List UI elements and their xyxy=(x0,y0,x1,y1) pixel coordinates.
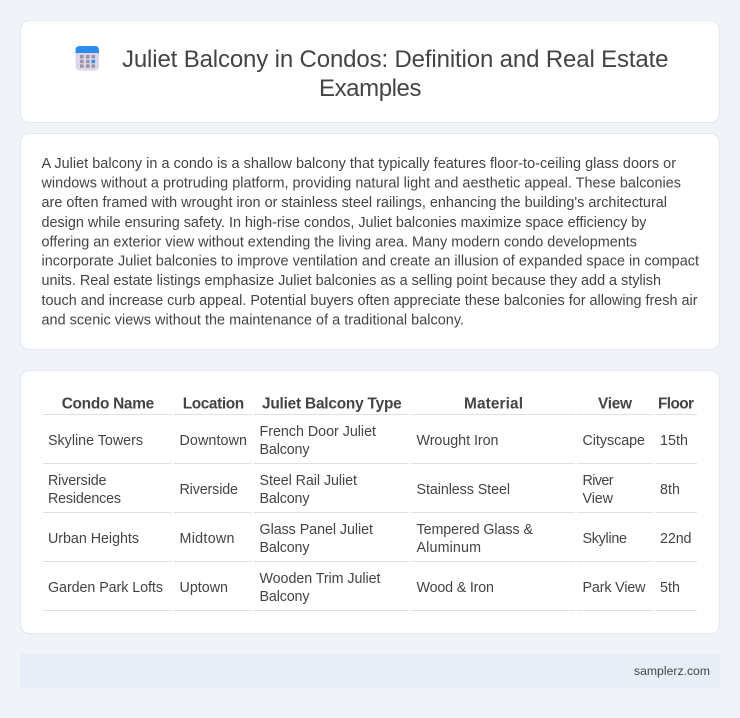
title: Juliet Balcony in Condos: Definition and Real Estate xyxy=(122,46,668,73)
table header: View xyxy=(598,396,632,412)
table row: Urban Heights: Glass Panel Juliet xyxy=(260,522,373,538)
table row: Riverside Residences: Riverside xyxy=(48,473,107,489)
table row: Urban Heights: Skyline xyxy=(582,531,627,547)
table row: Riverside Residences: Stainless Steel xyxy=(416,482,510,498)
description text: windows without a protruding platform, providing natural light and aesthetic appeal. These balconies xyxy=(40,176,681,192)
footer xyxy=(20,654,720,688)
table row: Garden Park Lofts: 5th xyxy=(660,580,680,596)
table header xyxy=(43,396,697,415)
panel: title card xyxy=(20,20,720,122)
table row: Skyline Towers: French Door Juliet xyxy=(260,424,376,440)
table row: Garden Park Lofts: Uptown xyxy=(180,580,228,596)
table row: Riverside Residences: View xyxy=(582,491,614,507)
description text: design while ensuring safety. In high-rise condos, Juliet balconies maximize space efficiency by xyxy=(42,215,647,231)
table row: Riverside Residences xyxy=(43,473,697,513)
table row: Urban Heights: Balcony xyxy=(260,540,310,556)
table row: Riverside Residences: 8th xyxy=(660,482,680,498)
table row: Urban Heights: Midtown xyxy=(180,531,235,547)
table row: Urban Heights: Aluminum xyxy=(416,540,481,556)
table row: Skyline Towers: Skyline Towers xyxy=(48,433,143,449)
description text: and scenic views without the maintenance of a traditional balcony. xyxy=(42,312,464,328)
table row: Garden Park Lofts: Park View xyxy=(582,580,646,596)
panel: condo table xyxy=(20,370,720,634)
table row: Skyline Towers xyxy=(43,424,697,464)
description text: offering an exterior view without extending the living area. Many modern condo developments xyxy=(42,234,637,250)
description text: touch and increase curb appeal. Potential buyers often appreciate these balconies for allowing fresh air xyxy=(42,293,698,309)
table row: Garden Park Lofts: Garden Park Lofts xyxy=(48,580,163,596)
table row: Riverside Residences: Riverside xyxy=(180,482,238,498)
table header: Condo Name xyxy=(62,396,155,412)
footer: samplerz.com xyxy=(634,664,710,678)
table row: Skyline Towers: 15th xyxy=(660,433,688,449)
description text: A Juliet balcony in a condo is a shallow balcony that typically features floor-to-ceiling glass doors or xyxy=(42,156,676,172)
icon: calendar xyxy=(76,46,99,70)
table row: Riverside Residences: Residences xyxy=(48,491,121,507)
table row: Urban Heights: Urban Heights xyxy=(48,531,139,547)
title: Examples xyxy=(319,75,422,102)
description text xyxy=(40,156,699,328)
table row: Skyline Towers: Wrought Iron xyxy=(416,433,499,449)
table row: Skyline Towers: Downtown xyxy=(180,433,247,449)
table header: Location xyxy=(183,396,244,412)
table header: Juliet Balcony Type xyxy=(262,396,402,412)
panel: description xyxy=(20,134,720,350)
title xyxy=(122,46,668,102)
table row: Riverside Residences: Steel Rail Juliet xyxy=(260,473,357,489)
table row: Riverside Residences: River xyxy=(582,473,614,489)
table row: Garden Park Lofts: Wood & Iron xyxy=(416,580,494,596)
description text: incorporate Juliet balconies to improve ventilation and create an illusion of expanded space in compact xyxy=(42,254,699,270)
table row: Urban Heights xyxy=(43,522,697,562)
table header: Floor xyxy=(658,396,694,412)
table row: Skyline Towers: Cityscape xyxy=(582,433,645,449)
table row: Skyline Towers: Balcony xyxy=(260,442,310,458)
table row: Urban Heights: 22nd xyxy=(660,531,692,547)
table row: Garden Park Lofts: Balcony xyxy=(260,589,310,605)
description text: are often framed with wrought iron or stainless steel railings, enhancing the building's architectural xyxy=(42,195,667,211)
table header: Material xyxy=(464,396,523,412)
description text: units. Real estate listings emphasize Juliet balconies as a selling point because they add a stylish xyxy=(42,273,661,289)
table row: Riverside Residences: Balcony xyxy=(260,491,310,507)
table row: Garden Park Lofts xyxy=(43,571,697,611)
table row: Garden Park Lofts: Wooden Trim Juliet xyxy=(260,571,381,587)
table row: Urban Heights: Tempered Glass & xyxy=(416,522,533,538)
